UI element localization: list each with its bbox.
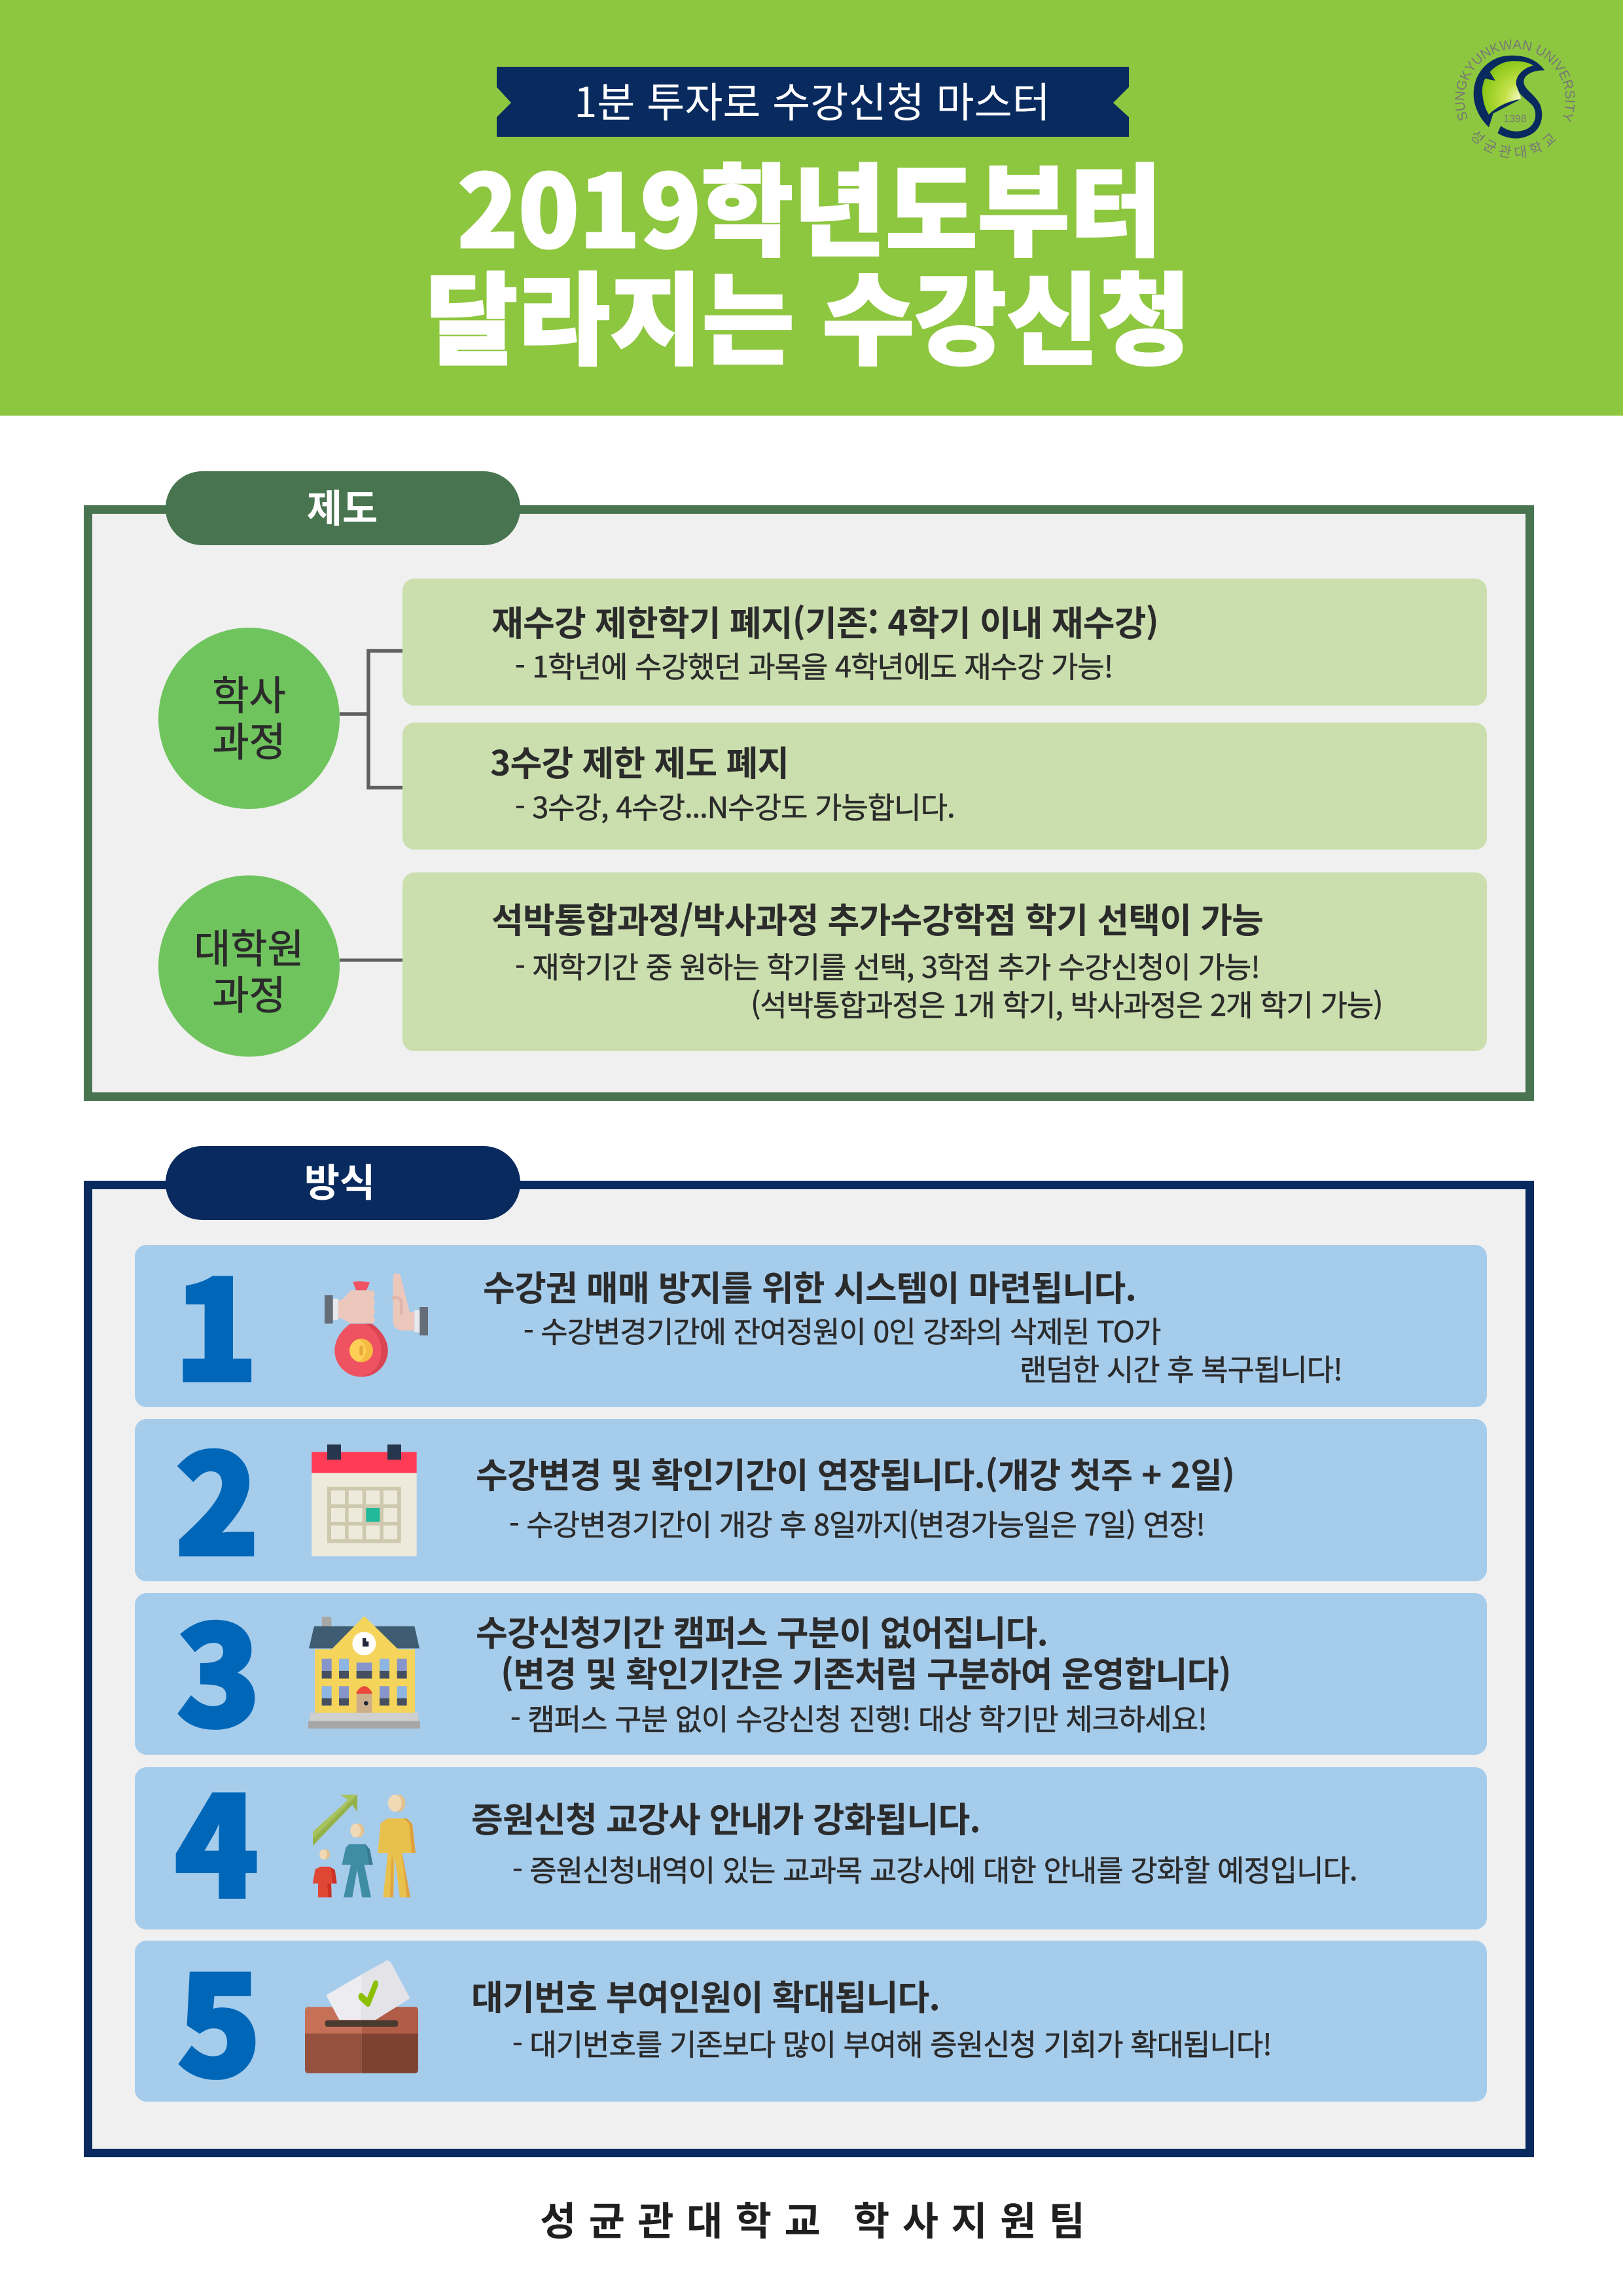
university logo: SUNGKYUNKWAN UNIVERSITY xyxy=(1455,39,1575,122)
university logo xyxy=(1455,39,1575,158)
text: 대기번호 확대: 대기번호 부여인원이 확대됩니다. xyxy=(471,1971,940,2020)
ribbon subtitle xyxy=(497,67,1129,137)
connector: 학사과정 xyxy=(340,651,402,788)
row 5 xyxy=(135,1917,1487,2116)
heading pill: 제도 xyxy=(166,471,520,545)
text: 수강권 매매 방지: 랜덤한 시간 후 복구됩니다! xyxy=(1020,1346,1342,1389)
number 1: 1 xyxy=(174,1221,258,1420)
card: 재수강 제한학기 폐지: - 1학년에 수강했던 과목을 4학년에도 재수강 가능! xyxy=(515,643,1113,686)
circle: 학사과정: 학사 xyxy=(212,663,286,721)
main title: 2019학년도부터 xyxy=(457,132,1162,277)
footer: 성균관대학교 학사지원팀: 학사지원팀 xyxy=(853,2190,1098,2247)
card: 석박통합과정 xyxy=(402,872,1487,1051)
card: 3수강 제한 제도 폐지: - 3수강, 4수강...N수강도 가능합니다. xyxy=(515,784,955,827)
circle: 대학원과정 xyxy=(158,876,340,1056)
text: 수강권 매매 방지 xyxy=(483,1261,1342,1389)
number 5: 5 xyxy=(177,1917,261,2116)
heading pill: 방식: 방식 xyxy=(304,1152,375,1208)
circle: 학사과정 xyxy=(158,628,340,809)
icon: campus building xyxy=(308,1616,420,1729)
circle: 학사과정: 과정 xyxy=(212,709,286,768)
main title: 달라지는 수강신청 xyxy=(426,241,1190,386)
circle: 대학원과정: 과정 xyxy=(212,963,286,1021)
card: 재수강 제한학기 폐지: 재수강 제한학기 폐지(기존: 4학기 이내 재수강) xyxy=(491,596,1158,646)
card: 3수강 제한 제도 폐지: 3수강 제한 제도 폐지 xyxy=(490,736,789,786)
card: 석박통합과정: 석박통합과정/박사과정 추가수강학점 학기 선택이 가능 xyxy=(491,893,1263,943)
text: 수강변경 연장 xyxy=(476,1448,1234,1544)
text: 캠퍼스 구분: - 캠퍼스 구분 없이 수강신청 진행! 대상 학기만 체크하세요! xyxy=(510,1696,1207,1738)
panel: 방식 xyxy=(88,1146,1530,2153)
row 3 xyxy=(135,1567,1487,1766)
heading pill: 제도: 제도 xyxy=(307,478,378,533)
card: 재수강 제한학기 폐지 xyxy=(402,579,1487,706)
row 4 xyxy=(135,1738,1487,1937)
icon: calendar xyxy=(312,1444,417,1556)
text: 대기번호 확대 xyxy=(471,1971,1272,2064)
card: 석박통합과정: - 재학기간 중 원하는 학기를 선택, 3학점 추가 수강신청이 가능! xyxy=(515,944,1260,986)
text: 캠퍼스 구분 xyxy=(476,1606,1231,1738)
footer: 성균관대학교 학사지원팀: 성균관대학교 xyxy=(540,2190,833,2247)
card: 석박통합과정: (석박통합과정은 1개 학기, 박사과정은 2개 학기 가능) xyxy=(751,982,1383,1024)
footer: 성균관대학교 학사지원팀 xyxy=(540,2190,1098,2247)
card: 3수강 제한 제도 폐지 xyxy=(402,723,1487,850)
heading pill: 방식 xyxy=(166,1146,520,1220)
university logo: 1398 xyxy=(1503,114,1527,125)
text: 증원신청 안내: - 증원신청내역이 있는 교과목 교강사에 대한 안내를 강화할 예정입니다. xyxy=(512,1847,1357,1890)
connector: 대학원과정 xyxy=(340,958,402,962)
panel: 제도 xyxy=(88,471,1530,1097)
text: 캠퍼스 구분: (변경 및 확인기간은 기존처럼 구분하여 운영합니다) xyxy=(501,1647,1231,1697)
text: 수강변경 연장: - 수강변경기간이 개강 후 8일까지(변경가능일은 7일) 연장! xyxy=(509,1501,1205,1544)
text: 수강변경 연장: 수강변경 및 확인기간이 연장됩니다.(개강 첫주 + 2일) xyxy=(476,1448,1234,1498)
text: 증원신청 안내: 증원신청 교강사 안내가 강화됩니다. xyxy=(471,1793,980,1842)
row 1 xyxy=(135,1221,1487,1420)
row 2 xyxy=(135,1395,1487,1594)
icon: growing people xyxy=(313,1795,416,1897)
number 4: 4 xyxy=(175,1738,259,1937)
number 2: 2 xyxy=(175,1395,259,1594)
text: 대기번호 확대: - 대기번호를 기존보다 많이 부여해 증원신청 기회가 확대됩니다! xyxy=(512,2021,1272,2064)
text: 증원신청 안내 xyxy=(471,1793,1357,1890)
number 3: 3 xyxy=(177,1567,260,1766)
circle: 대학원과정: 대학원 xyxy=(194,916,304,975)
ribbon subtitle: 1분 투자로 수강신청 마스터 xyxy=(574,70,1050,130)
icon: ballot box xyxy=(305,1960,418,2073)
university logo: 성균관대학교 xyxy=(1472,131,1556,158)
icon: money bag refused xyxy=(325,1273,428,1377)
main title xyxy=(426,132,1190,386)
text: 수강권 매매 방지: 수강권 매매 방지를 위한 시스템이 마련됩니다. xyxy=(483,1261,1136,1311)
header banner xyxy=(0,0,1623,416)
text: 캠퍼스 구분: 수강신청기간 캠퍼스 구분이 없어집니다. xyxy=(476,1606,1048,1656)
text: 수강권 매매 방지: - 수강변경기간에 잔여정원이 0인 강좌의 삭제된 TO가 xyxy=(524,1308,1160,1351)
